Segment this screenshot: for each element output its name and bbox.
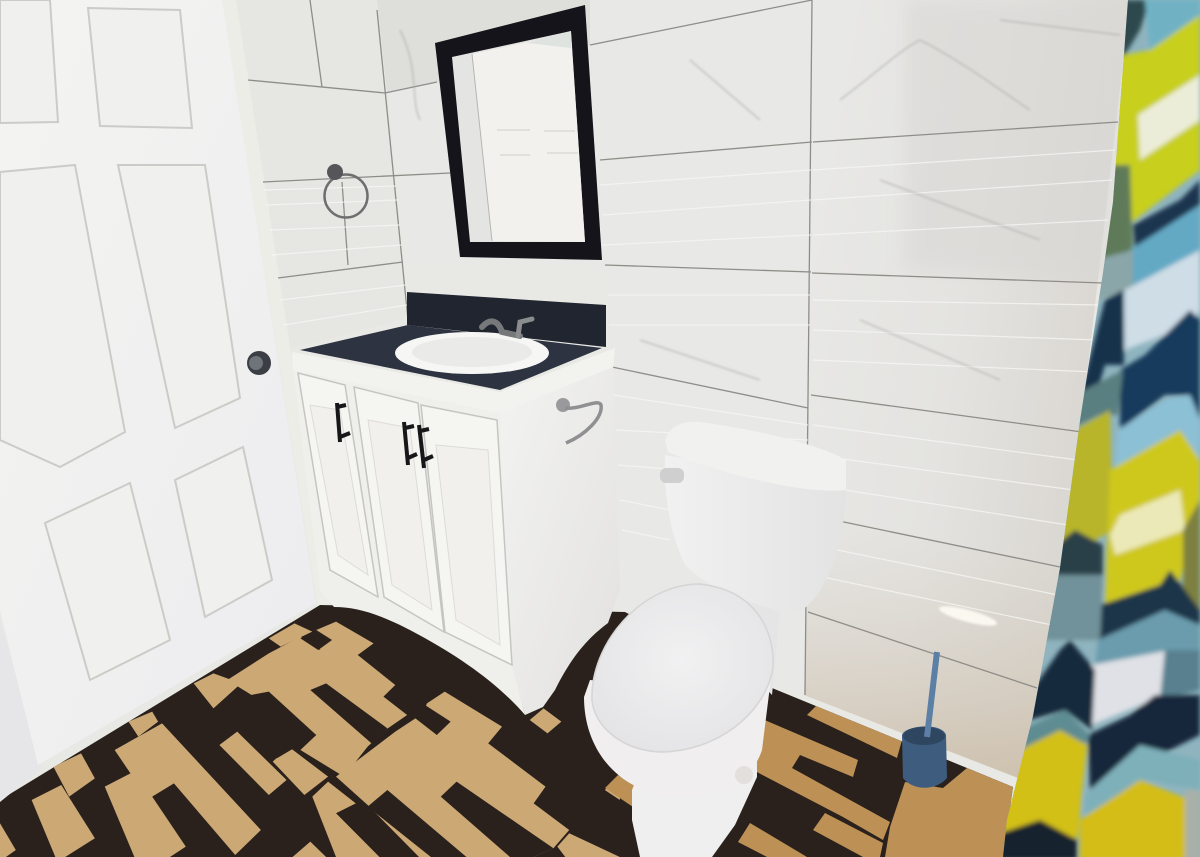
- door panel: middle left: [0, 165, 125, 467]
- towel ring: [324, 164, 368, 218]
- toilet tank: [665, 455, 846, 611]
- door frame: [222, 0, 330, 608]
- door panel: lower left: [45, 483, 170, 680]
- door panel: upper middle: [88, 8, 192, 128]
- cabinet door: left: [298, 373, 378, 597]
- mirror: [435, 5, 602, 260]
- counter top: [300, 325, 602, 390]
- tank lever: [660, 468, 684, 483]
- vanity cabinet: [292, 319, 620, 715]
- toilet base: [632, 750, 757, 857]
- cabinet handles: [337, 403, 433, 468]
- door panel: lower right: [175, 447, 272, 617]
- icon: door knob: [247, 351, 271, 375]
- sink basin: [395, 332, 549, 374]
- toilet tank lid: [665, 422, 846, 491]
- backsplash: [407, 292, 606, 347]
- faucet: [482, 319, 532, 336]
- shower curtain: [995, 0, 1200, 857]
- toilet neck: [700, 585, 780, 695]
- cabinet side: [500, 360, 620, 715]
- toilet brush holder: [902, 652, 947, 788]
- toilet lid: [592, 584, 773, 752]
- floor: wood-look tiles: [0, 605, 1013, 857]
- towel bar: [556, 398, 601, 443]
- bolt cap: [735, 766, 753, 784]
- door: white six-panel door: [0, 0, 316, 802]
- door panel: upper left: [0, 0, 58, 123]
- toilet: [584, 422, 846, 857]
- cabinet door: right: [421, 405, 512, 665]
- toilet bowl: [584, 670, 772, 797]
- door panel: middle right: [118, 165, 240, 428]
- cabinet door: middle: [354, 387, 444, 632]
- counter rim: [292, 348, 615, 413]
- glare on wall: [937, 602, 999, 630]
- cabinet front and arch: [293, 368, 525, 715]
